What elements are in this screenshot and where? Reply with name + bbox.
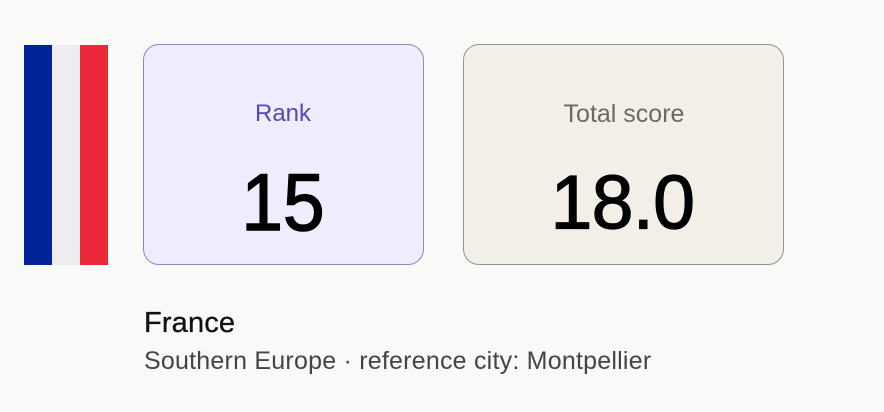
rank label: Rank bbox=[255, 100, 311, 127]
panel: rank bbox=[143, 44, 424, 265]
panel: total score bbox=[463, 44, 784, 265]
icon: flag of France bbox=[24, 45, 108, 265]
heading: country name: France bbox=[144, 307, 235, 339]
text block: region and reference city: Southern Europe · reference city: Montpellier bbox=[144, 347, 651, 375]
total score label: Total score bbox=[564, 100, 684, 128]
total score value: 18.0 bbox=[551, 159, 694, 245]
rank value: 15 bbox=[241, 157, 325, 247]
